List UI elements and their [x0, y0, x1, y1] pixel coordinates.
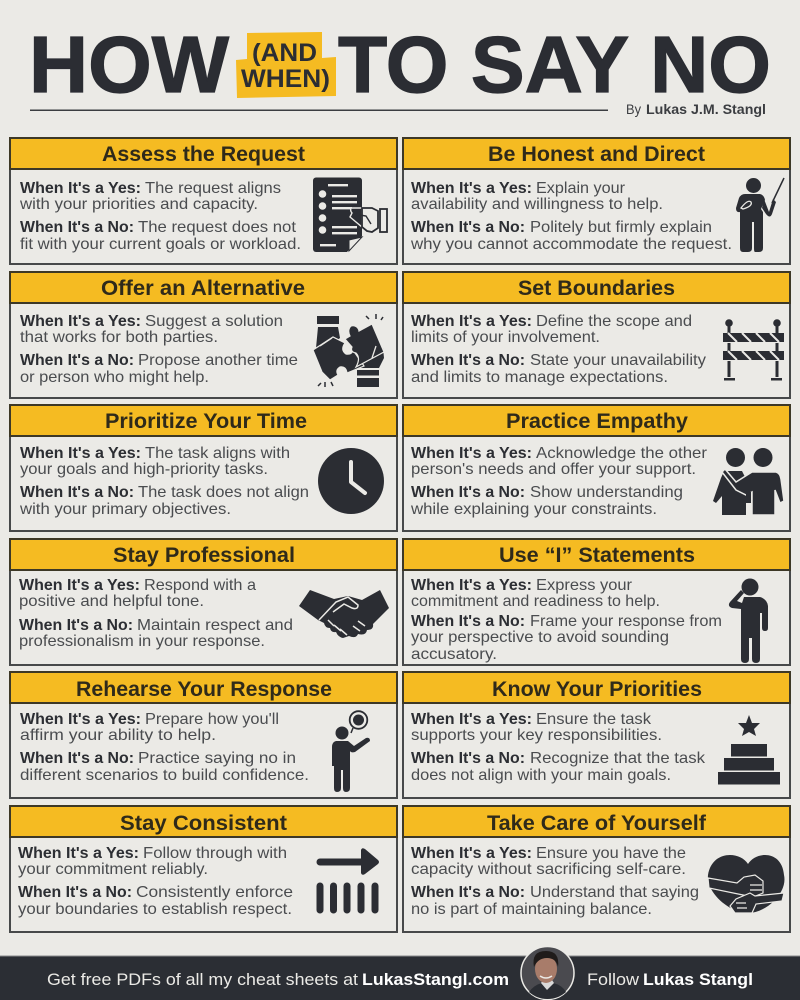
byline: By — [626, 102, 641, 117]
panel: Stay Consistent: Consistently enforce — [136, 884, 293, 901]
panel: Practice Empathy: Practice Empathy — [506, 410, 688, 433]
footer text: free PDFs — [47, 970, 509, 989]
panel: Stay Professional: When It's a No: — [19, 617, 133, 634]
panel: Set Boundaries — [403, 272, 790, 398]
panel: Assess the Request — [10, 138, 397, 264]
panel: Rehearse Your Response: Practice saying no in — [138, 750, 296, 767]
icon: star on podium — [718, 715, 780, 784]
panel: Stay Consistent: Stay Consistent — [120, 812, 287, 835]
panel: Rehearse Your Response: Prepare how you'll — [145, 711, 279, 728]
panel: Prioritize Your Time — [10, 405, 397, 531]
panel: Stay Professional — [10, 539, 397, 665]
panel: Offer an Alternative: that works for both parties. — [20, 329, 218, 346]
panel: Stay Consistent: Follow through with — [143, 845, 287, 862]
panel: Set Boundaries: limits of your involvement. — [411, 329, 600, 346]
footer text: follow — [587, 970, 753, 989]
panel: Be Honest and Direct: Politely but firmly explain — [530, 219, 712, 236]
panel: Use I Statements: Frame your response from — [530, 613, 722, 630]
footer text: follow: Follow — [587, 970, 640, 989]
panel: Assess the Request: The request aligns — [145, 180, 281, 197]
panel: Be Honest and Direct: When It's a Yes: — [411, 180, 532, 197]
panel: Know Your Priorities: Recognize that the task — [530, 750, 705, 767]
panel: Assess the Request: When It's a Yes: — [20, 180, 141, 197]
icon: person with speech bubble — [332, 711, 370, 792]
panel: Practice Empathy: When It's a Yes: — [411, 445, 532, 462]
panel: Rehearse Your Response: different scenarios to build confidence. — [20, 767, 309, 784]
panel: Know Your Priorities: When It's a No: — [411, 750, 525, 767]
panel: Know Your Priorities: Know Your Priorities — [492, 678, 702, 701]
icon: two people embracing — [713, 448, 784, 515]
panel: Know Your Priorities: When It's a Yes: — [411, 711, 532, 728]
footer bar — [0, 946, 800, 1000]
panel: Be Honest and Direct — [403, 138, 790, 264]
panel: Use I Statements: Express your — [536, 577, 632, 594]
title: HOW — [29, 20, 229, 109]
panel: Practice Empathy: Acknowledge the other — [536, 445, 707, 462]
icon: clock — [318, 448, 384, 514]
panel: Use I Statements: When It's a No: — [411, 613, 525, 630]
panel: Stay Consistent: your boundaries to establish respect. — [18, 901, 292, 918]
icon: heart embraced by hands — [708, 855, 784, 913]
panel: Assess the Request: When It's a No: — [20, 219, 134, 236]
panel: Use I Statements: Use “I” Statements — [499, 544, 695, 567]
panel: Set Boundaries: Define the scope and — [536, 313, 692, 330]
panel: Stay Professional: Stay Professional — [113, 544, 295, 567]
icon: person with pointer — [736, 178, 784, 252]
panel: Assess the Request: Assess the Request — [102, 143, 305, 166]
panel: Prioritize Your Time: your goals and high-priority tasks. — [20, 461, 268, 478]
byline: Lukas J.M. Stangl — [646, 102, 766, 117]
panel: Set Boundaries: Set Boundaries — [518, 277, 675, 300]
panel: Take Care of Yourself: Ensure you have the — [536, 845, 686, 862]
panel: Stay Consistent — [10, 806, 397, 932]
panel: Set Boundaries: State your unavailability — [530, 352, 706, 369]
footer text: free PDFs: Get free PDFs of all my cheat sheets at — [47, 970, 358, 989]
panel: Set Boundaries: When It's a Yes: — [411, 313, 532, 330]
panel: Use I Statements: commitment and readiness to help. — [411, 593, 660, 610]
panel: Stay Consistent: When It's a No: — [18, 884, 132, 901]
panel: Offer an Alternative: When It's a No: — [20, 352, 134, 369]
panel: Offer an Alternative: When It's a Yes: — [20, 313, 141, 330]
avatar portrait — [521, 946, 574, 1000]
panel: Stay Consistent: When It's a Yes: — [18, 845, 139, 862]
panel: Take Care of Yourself: When It's a Yes: — [411, 845, 532, 862]
panel: Stay Professional: professionalism in your response. — [19, 633, 265, 650]
panel: Take Care of Yourself: Understand that saying — [530, 884, 699, 901]
panel: Offer an Alternative: Offer an Alternative — [101, 277, 305, 300]
panel: Take Care of Yourself: Take Care of Yourself — [487, 812, 707, 835]
panel: Prioritize Your Time: with your primary objectives. — [19, 501, 231, 518]
title highlight: and when — [236, 32, 336, 98]
footer text: free PDFs: LukasStangl.com — [362, 970, 509, 989]
panel: Rehearse Your Response: When It's a Yes: — [20, 711, 141, 728]
panel: Prioritize Your Time: The task aligns with — [145, 445, 290, 462]
icon: hands joining puzzle pieces — [313, 314, 384, 387]
panel: Rehearse Your Response: affirm your ability to help. — [20, 727, 216, 744]
panel: Offer an Alternative: or person who might help. — [20, 369, 209, 386]
icon: handshake — [299, 590, 389, 638]
panel: Practice Empathy: while explaining your constraints. — [410, 501, 657, 518]
footer text: follow: Lukas Stangl — [643, 970, 753, 989]
panel: Offer an Alternative — [10, 272, 397, 398]
panel: Know Your Priorities: Ensure the task — [536, 711, 651, 728]
panel: Stay Professional: positive and helpful tone. — [19, 593, 204, 610]
panel: Stay Consistent: your commitment reliably. — [18, 861, 208, 878]
panel: Use I Statements: When It's a Yes: — [411, 577, 532, 594]
panel: Practice Empathy — [403, 405, 790, 531]
panel: Assess the Request: fit with your current goals or workload. — [20, 236, 301, 253]
panel: Stay Professional: Respond with a — [144, 577, 256, 594]
panel: Prioritize Your Time: When It's a No: — [20, 484, 134, 501]
panel: Stay Professional: When It's a Yes: — [19, 577, 140, 594]
title highlight: and when: (AND — [252, 39, 317, 67]
panel: Rehearse Your Response — [10, 672, 397, 798]
icon: road barrier — [723, 319, 784, 380]
title — [29, 20, 771, 109]
title highlight: and when: WHEN) — [241, 65, 330, 93]
panel: Rehearse Your Response: Rehearse Your Response — [76, 678, 332, 701]
panel: Be Honest and Direct: Be Honest and Direct — [488, 143, 705, 166]
panel: Use I Statements: accusatory. — [411, 646, 497, 663]
panel: Use I Statements: your perspective to avoid sounding — [411, 629, 669, 646]
panel: Take Care of Yourself — [403, 806, 790, 932]
panel: Take Care of Yourself: When It's a No: — [411, 884, 525, 901]
icon: document and hand — [313, 178, 387, 252]
panel: Be Honest and Direct: availability and willingness to help. — [411, 196, 663, 213]
panel: Assess the Request: The request does not — [138, 219, 297, 236]
panel: Prioritize Your Time: Prioritize Your Time — [105, 410, 307, 433]
panel: Be Honest and Direct: When It's a No: — [411, 219, 525, 236]
panel: Rehearse Your Response: When It's a No: — [20, 750, 134, 767]
panel: Know Your Priorities: supports your key responsibilities. — [411, 727, 662, 744]
panel: Prioritize Your Time: The task does not align — [138, 484, 309, 501]
panel: Know Your Priorities — [403, 672, 790, 798]
panel: Offer an Alternative: Propose another time — [138, 352, 298, 369]
panel: Practice Empathy: person's needs and offer your support. — [411, 461, 696, 478]
panel: Use I Statements — [403, 539, 790, 665]
panel: Know Your Priorities: does not align with your main goals. — [411, 767, 671, 784]
icon: arrow over bars — [316, 848, 379, 910]
title: TO SAY NO — [338, 20, 771, 109]
panel: Assess the Request: with your priorities and capacity. — [19, 196, 258, 213]
icon: person pointing to self — [729, 578, 768, 663]
panel: Be Honest and Direct: why you cannot accommodate the request. — [410, 236, 732, 253]
panel: Offer an Alternative: Suggest a solution — [145, 313, 283, 330]
panel: Take Care of Yourself: capacity without sacrificing self-care. — [411, 861, 686, 878]
panel: Be Honest and Direct: Explain your — [536, 180, 625, 197]
panel: Practice Empathy: Show understanding — [530, 484, 683, 501]
panel: Prioritize Your Time: When It's a Yes: — [20, 445, 141, 462]
panel: Set Boundaries: and limits to manage expectations. — [411, 369, 668, 386]
panel: Take Care of Yourself: no is part of maintaining balance. — [411, 901, 652, 918]
panel: Stay Professional: Maintain respect and — [137, 617, 293, 634]
panel: Practice Empathy: When It's a No: — [411, 484, 525, 501]
panel: Set Boundaries: When It's a No: — [411, 352, 525, 369]
